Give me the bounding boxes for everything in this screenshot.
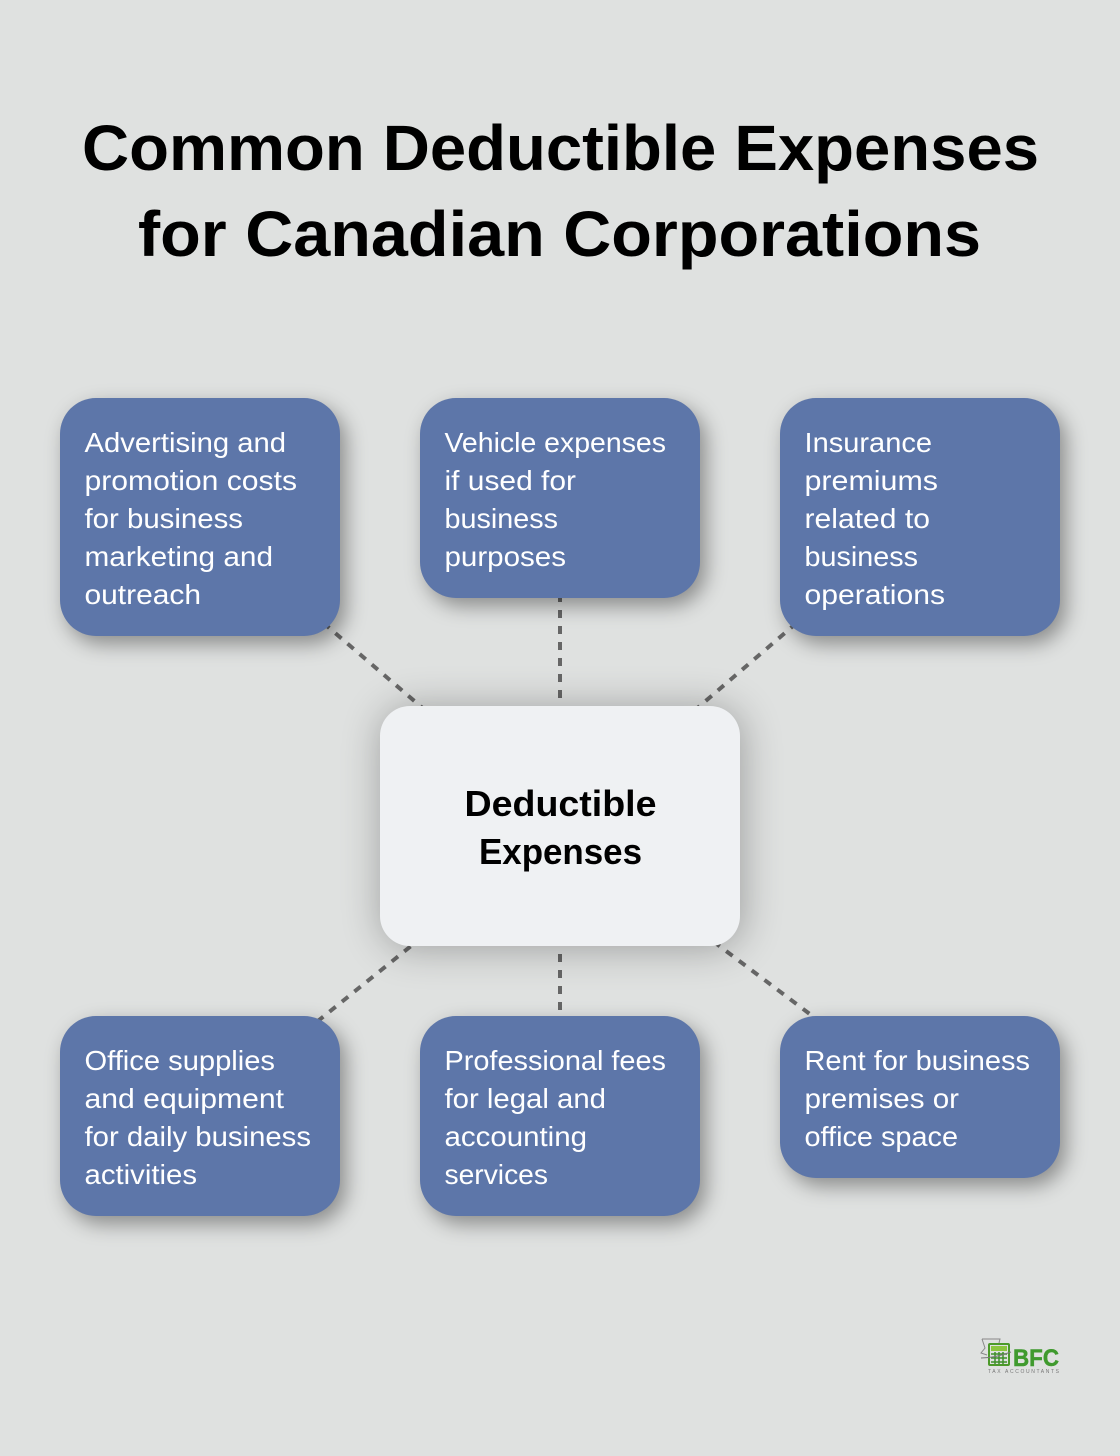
panel: vehicle expenses: purposes bbox=[444, 541, 566, 572]
panel: rent: premises or bbox=[804, 1083, 959, 1114]
panel: central deductible expenses: Expenses bbox=[479, 831, 642, 872]
panel: professional fees: services bbox=[444, 1159, 548, 1190]
panel: insurance premiums: operations bbox=[804, 579, 945, 610]
panel: insurance premiums: related to bbox=[804, 503, 930, 534]
panel: professional fees: for legal and bbox=[444, 1083, 606, 1114]
panel: professional fees: Professional fees bbox=[444, 1045, 666, 1076]
panel: vehicle expenses: if used for bbox=[444, 465, 576, 496]
panel: advertising and promotion: promotion costs bbox=[84, 465, 297, 496]
panel: insurance premiums bbox=[780, 398, 1060, 636]
panel: vehicle expenses bbox=[420, 398, 700, 598]
panel: advertising and promotion bbox=[60, 398, 340, 636]
panel: insurance premiums: premiums bbox=[804, 465, 938, 496]
icon: BFC logo bbox=[980, 1338, 1060, 1375]
panel: office supplies: activities bbox=[84, 1159, 197, 1190]
panel: advertising and promotion: outreach bbox=[84, 579, 201, 610]
panel: office supplies bbox=[60, 1016, 340, 1216]
panel: central deductible expenses bbox=[380, 706, 740, 946]
panel: rent: office space bbox=[804, 1121, 958, 1152]
icon: BFC logo: TAX ACCOUNTANTS bbox=[988, 1369, 1060, 1375]
title: Common Deductible Expenses bbox=[82, 112, 1039, 184]
panel: professional fees: accounting bbox=[444, 1121, 587, 1152]
panel: advertising and promotion: for business bbox=[84, 503, 243, 534]
panel: central deductible expenses: Deductible bbox=[464, 783, 656, 824]
panel: rent bbox=[780, 1016, 1060, 1178]
panel: rent: Rent for business bbox=[804, 1045, 1030, 1076]
panel: vehicle expenses: business bbox=[444, 503, 558, 534]
title bbox=[82, 112, 1039, 270]
panel: insurance premiums: Insurance bbox=[804, 427, 932, 458]
panel: office supplies: Office supplies bbox=[84, 1045, 275, 1076]
panel: vehicle expenses: Vehicle expenses bbox=[444, 427, 666, 458]
panel: advertising and promotion: Advertising and bbox=[84, 427, 286, 458]
panel: office supplies: for daily business bbox=[84, 1121, 311, 1152]
panel: office supplies: and equipment bbox=[84, 1083, 284, 1114]
icon: BFC logo: BFC bbox=[1013, 1345, 1059, 1372]
title: for Canadian Corporations bbox=[138, 198, 981, 270]
panel: advertising and promotion: marketing and bbox=[84, 541, 273, 572]
panel: insurance premiums: business bbox=[804, 541, 918, 572]
panel: professional fees bbox=[420, 1016, 700, 1216]
